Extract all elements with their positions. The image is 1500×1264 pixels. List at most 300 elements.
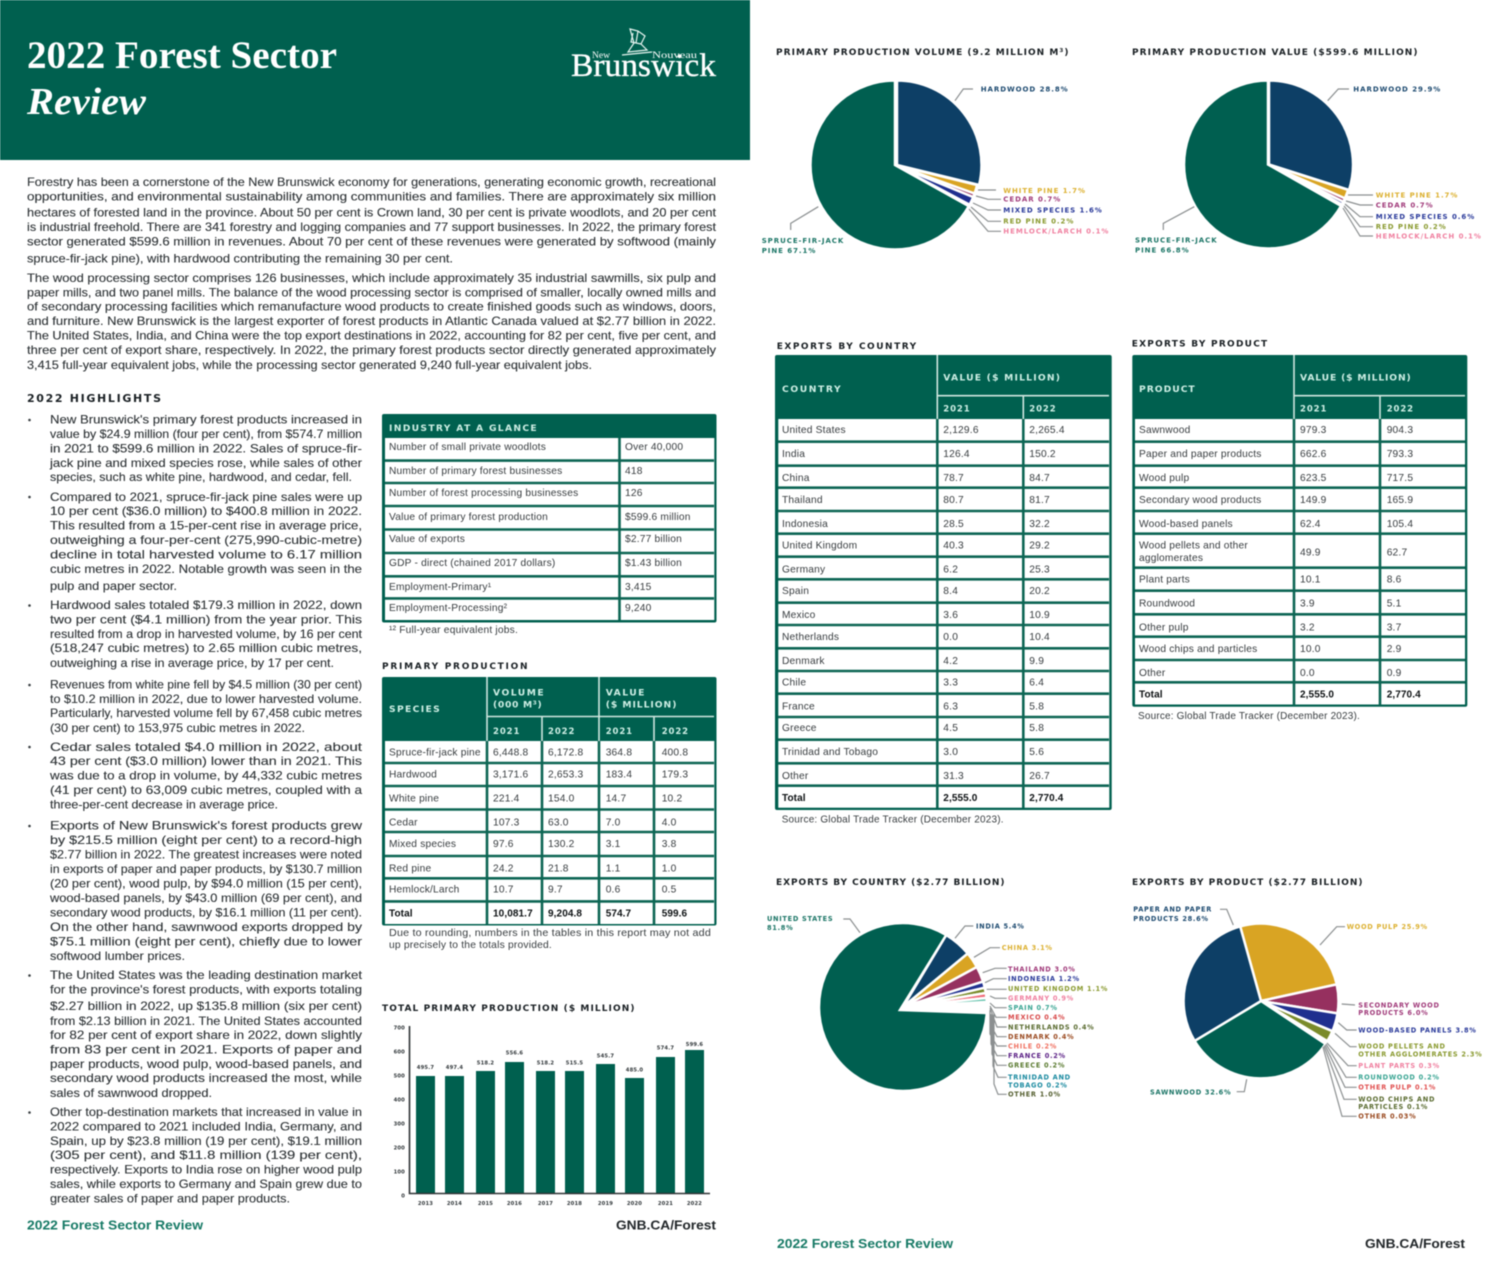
- pie labels: CEDAR 0.7%: [1376, 201, 1434, 209]
- pie labels: OTHER 1.0%: [1008, 1091, 1061, 1099]
- table: primary production: 7.0: [606, 818, 621, 828]
- intro text: is industrial freehold. There are 341 forestry and logging companies and 77 support businesses. In 2022, the primary forest: [27, 221, 717, 234]
- table: primary production: White pine: [389, 794, 439, 804]
- table: exports by country: 3.3: [943, 678, 958, 688]
- table: primary production: 599.6: [662, 908, 688, 920]
- heading: total primary production: TOTAL PRIMARY PRODUCTION ($ MILLION): [382, 1004, 635, 1014]
- table: exports by country: 2,555.0: [943, 793, 978, 804]
- table: exports by product: Paper and paper products: [1139, 449, 1262, 460]
- pie labels: PINE 67.1%: [762, 247, 816, 255]
- highlights bullet list: resulted from a drop in harvested volume, by 16 per cent: [50, 628, 363, 641]
- table: exports by product: 49.9: [1300, 548, 1321, 558]
- table: primary production: ($ MILLION): [606, 700, 678, 710]
- table: primary production: 107.3: [493, 818, 520, 828]
- highlights bullet list: greater sales of paper and paper products.: [50, 1192, 290, 1206]
- pie labels: [762, 85, 1109, 255]
- bars: [416, 1050, 704, 1194]
- table: exports by country: Germany: [782, 564, 826, 576]
- pie labels: WOOD CHIPS AND: [1358, 1096, 1435, 1104]
- table: exports by country: China: [782, 473, 810, 484]
- table: exports by product: 3.2: [1300, 622, 1315, 634]
- table: primary production: 1.0: [662, 864, 677, 874]
- intro text: three per cent of export share, respectively. In 2022, the primary forest products sector directly generated approximately: [27, 344, 716, 357]
- pie labels: ROUNDWOOD 0.2%: [1358, 1074, 1440, 1082]
- table: exports by country: France: [782, 702, 815, 712]
- highlights bullet list: for 82 per cent of export share in 2022, down slightly: [50, 1029, 362, 1042]
- table: industry at a glance: 418: [625, 466, 643, 477]
- table: primary production: (000 M³): [493, 700, 543, 710]
- table: exports by product: Other: [1139, 668, 1166, 679]
- intro text: of secondary processing facilities which remanufacture wood products to create finished goods such as windows, doors,: [27, 300, 716, 314]
- highlights bullet list: in exports of paper and paper products, by $130.7 million: [50, 863, 362, 876]
- New Brunswick logo: Brunswick: [571, 48, 716, 84]
- table: exports by product: 8.6: [1387, 574, 1402, 586]
- heading: exports by product table: EXPORTS BY PRODUCT: [1132, 340, 1268, 350]
- highlights bullet list: This resulted from a 15-per-cent rise in average price,: [50, 520, 362, 532]
- table: exports by product: PRODUCT: [1139, 384, 1196, 395]
- table: exports by product: 3.7: [1387, 622, 1402, 634]
- y axis labels: 500: [394, 1074, 405, 1080]
- table: exports by country: United States: [782, 425, 846, 436]
- table: exports by product: Wood chips and particles: [1139, 644, 1257, 655]
- table: exports by product: 2,770.4: [1387, 690, 1421, 700]
- table: exports by country: Mexico: [782, 610, 816, 621]
- highlights bullet list: [28, 414, 363, 1206]
- highlights bullet list: secondary wood products increased the most, while: [50, 1072, 362, 1085]
- table: industry at a glance: $599.6 million: [625, 512, 691, 523]
- pie labels: [1135, 85, 1482, 254]
- table: industry at a glance: $2.77 billion: [625, 534, 682, 545]
- y axis labels: 0: [401, 1194, 405, 1200]
- table: industry at a glance: INDUSTRY AT A GLANCE: [389, 423, 538, 434]
- year labels: 2019: [598, 1201, 613, 1207]
- y axis labels: 200: [394, 1146, 405, 1152]
- table: industry at a glance: Value of primary forest production: [389, 512, 548, 523]
- intro text: 3,415 full-year equivalent jobs, while the processing sector generated 9,240 full-year equivalent jobs.: [27, 359, 592, 372]
- pie labels: SPRUCE-FIR-JACK: [1135, 236, 1218, 244]
- pie labels: GERMANY 0.9%: [1008, 994, 1074, 1002]
- pie labels: CHILE 0.2%: [1008, 1042, 1057, 1050]
- bar value labels: 518.2: [537, 1060, 554, 1066]
- table: primary production: 21.8: [548, 864, 569, 874]
- table: primary production: 0.5: [662, 884, 677, 896]
- highlights bullet list: pulp and paper sector.: [50, 580, 177, 593]
- pie labels: NETHERLANDS 0.4%: [1008, 1023, 1094, 1031]
- table: exports by country: India: [782, 449, 805, 460]
- table: exports by country: 2,265.4: [1029, 425, 1065, 436]
- highlights bullet list: sales, while exports to Germany and Spain grew due to: [50, 1178, 363, 1191]
- pie chart: primary production volume: [762, 80, 1109, 255]
- bar value labels: 574.7: [657, 1046, 674, 1052]
- table: primary production: 1.1: [606, 864, 621, 874]
- source note: country table: Source: Global Trade Tracker (December 2023).: [782, 814, 1004, 826]
- pie labels: MIXED SPECIES 1.6%: [1003, 206, 1103, 214]
- year labels: 2021: [658, 1201, 673, 1207]
- y axis labels: 600: [394, 1050, 405, 1056]
- report title: [26, 34, 337, 123]
- table: primary production: 63.0: [548, 818, 569, 828]
- table: exports by country: 31.3: [943, 771, 964, 782]
- table: exports by country: COUNTRY: [782, 384, 842, 395]
- table: primary production: Total: [389, 908, 413, 920]
- pie labels: THAILAND 3.0%: [1008, 965, 1076, 973]
- highlights bullet list: was due to a drop in volume, by 44,332 cubic metres: [49, 770, 362, 782]
- New Brunswick logo: [571, 29, 716, 84]
- table: primary production: 97.6: [493, 839, 514, 850]
- table: primary production: 14.7: [606, 794, 626, 804]
- highlights bullet list: respectively. Exports to India rose on higher wood pulp: [50, 1164, 363, 1176]
- table: primary production: 2022: [548, 727, 575, 737]
- table: primary production: VOLUME: [493, 688, 545, 698]
- table: industry at a glance: Employment-Primary¹: [389, 582, 492, 593]
- year labels: 2020: [627, 1201, 642, 1207]
- footnote: jobs: ¹² Full-year equivalent jobs.: [389, 625, 518, 636]
- highlights bullet list: outweighing a rise in average price, by 17 per cent.: [50, 657, 334, 670]
- table: exports by product: 149.9: [1300, 495, 1327, 506]
- y axis labels: [394, 1026, 405, 1200]
- pie labels: SPRUCE-FIR-JACK: [762, 237, 844, 245]
- footer: right page: 2022 Forest Sector Review: [777, 1236, 954, 1251]
- table: primary production: Mixed species: [389, 839, 456, 850]
- pie labels: TRINIDAD AND: [1008, 1074, 1071, 1082]
- note: rounding: Due to rounding, numbers in the tables in this report may not add: [389, 928, 711, 939]
- table: exports by country: Netherlands: [782, 632, 839, 643]
- table: exports by country: 5.6: [1029, 747, 1044, 758]
- table: primary production: 183.4: [606, 770, 632, 780]
- highlights bullet list: 2022 compared to 2021 included India, Germany, and: [50, 1120, 362, 1134]
- highlights bullet list: softwood lumber prices.: [50, 950, 185, 963]
- table: exports by product: 2,555.0: [1300, 690, 1334, 700]
- table: exports by country: 32.2: [1029, 519, 1050, 530]
- heading: primary production volume: PRIMARY PRODUCTION VOLUME (9.2 MILLION M³): [776, 48, 1069, 58]
- pie labels: OTHER AGGLOMERATES 2.3%: [1358, 1050, 1482, 1058]
- table: exports by country: 25.3: [1029, 564, 1050, 576]
- table: primary production: 10,081.7: [493, 908, 533, 920]
- table: exports by country: Trinidad and Tobago: [782, 747, 878, 758]
- table: exports by country: [775, 355, 1112, 810]
- table: exports by product: Secondary wood products: [1139, 495, 1261, 506]
- table: exports by product: Sawnwood: [1139, 425, 1191, 436]
- bar value labels: 495.7: [417, 1065, 434, 1071]
- pie labels: HARDWOOD 28.8%: [981, 85, 1069, 93]
- table: industry at a glance: Value of exports: [389, 534, 465, 545]
- highlights bullet list: Compared to 2021, spruce-fir-jack pine sales were up: [50, 491, 363, 504]
- table: exports by country: 2022: [1029, 404, 1057, 414]
- table: exports by product: 2.9: [1387, 644, 1402, 655]
- table: primary production: SPECIES: [389, 704, 441, 715]
- table: exports by product: Wood pellets and other: [1139, 540, 1248, 552]
- table: primary production: 6,448.8: [493, 748, 529, 758]
- intro text: and furniture. New Brunswick is the largest exporter of forest products in Atlantic Canada valued at $2.77 billion in 2022.: [27, 315, 716, 328]
- bar value labels: 485.0: [626, 1068, 643, 1074]
- y axis labels: 300: [394, 1122, 405, 1128]
- highlights bullet list: 43 per cent ($3.0 million) lower than in 2021. This: [50, 755, 362, 768]
- table: industry at a glance: 126: [625, 488, 643, 499]
- table: exports by country: 8.4: [943, 586, 958, 597]
- table: exports by country: 6.2: [943, 564, 958, 576]
- table: primary production: 3.8: [662, 839, 677, 850]
- highlights bullet list: cubic metres in 2022. Notable growth was seen in the: [50, 563, 362, 576]
- table: industry at a glance: Number of primary forest businesses: [389, 466, 562, 477]
- highlights bullet list: paper products, wood pulp, wood-based panels, and: [50, 1058, 362, 1071]
- pie labels: [767, 915, 1108, 1099]
- pie labels: TOBAGO 0.2%: [1008, 1081, 1068, 1089]
- highlights bullet list: jack pine and mixed species rose, while sales of other: [49, 457, 362, 470]
- table: exports by product: Total: [1139, 690, 1163, 700]
- highlights bullet list: species, such as white pine, hardwood, and cedar, fell.: [50, 471, 352, 484]
- table: exports by country: 0.0: [943, 632, 958, 643]
- table: exports by product: 662.6: [1300, 449, 1327, 460]
- highlights bullet list: secondary wood products, by $16.1 million (11 per cent).: [50, 906, 362, 920]
- highlights bullet list: New Brunswick's primary forest products increased in: [50, 414, 362, 426]
- year labels: 2017: [538, 1201, 553, 1207]
- year labels: 2022: [687, 1201, 702, 1207]
- highlights bullet list: $75.1 million (eight per cent), chiefly due to lower: [50, 936, 362, 948]
- report title: Review: [26, 81, 147, 123]
- pie labels: PRODUCTS 28.6%: [1133, 915, 1209, 923]
- highlights bullet list: two per cent ($4.1 million) from the year prior. This: [50, 614, 362, 626]
- pie labels: [1133, 906, 1482, 1121]
- highlights bullet list: value by $24.9 million (four per cent), from $574.7 million: [50, 428, 362, 441]
- table: primary production: 9,204.8: [548, 908, 582, 920]
- highlights bullet list: from $2.13 billion in 2021. The United States accounted: [50, 1015, 362, 1028]
- table: exports by country: 20.2: [1029, 586, 1050, 597]
- highlights bullet list: The United States was the leading destination market: [50, 969, 363, 982]
- table: exports by country: Spain: [782, 586, 809, 597]
- intro text: sector generated $599.6 million in revenues. About 70 per cent of these revenues were generated by softwood (mainly: [27, 236, 716, 248]
- highlights bullet list: Other top-destination markets that increased in value in: [50, 1106, 362, 1119]
- table: exports by product: 5.1: [1387, 598, 1402, 610]
- table: primary production: 0.6: [606, 884, 621, 896]
- header banner: [0, 0, 750, 160]
- bar value labels: [417, 1042, 703, 1074]
- table: industry at a glance: [382, 414, 716, 622]
- highlights bullet list: for the province's forest products, with exports totaling: [50, 984, 362, 996]
- table: exports by country: 28.5: [943, 519, 964, 530]
- table: exports by country: 2021: [943, 404, 971, 414]
- table: exports by product: 2021: [1300, 404, 1327, 414]
- table: exports by product: 62.4: [1300, 519, 1321, 530]
- table: exports by country: 150.2: [1029, 449, 1056, 460]
- bar value labels: 518.2: [477, 1060, 494, 1066]
- table: exports by product: Plant parts: [1139, 574, 1190, 586]
- table: primary production: 179.3: [662, 770, 688, 780]
- table: exports by country: 10.9: [1029, 610, 1050, 621]
- pie labels: RED PINE 0.2%: [1003, 218, 1074, 226]
- highlights bullet list: Exports of New Brunswick's forest products grew: [50, 820, 363, 832]
- table: primary production: 130.2: [548, 839, 575, 850]
- table: exports by country: United Kingdom: [782, 540, 857, 552]
- table: industry at a glance: 3,415: [625, 582, 652, 593]
- table: exports by country: 3.0: [943, 747, 958, 758]
- table: exports by country: Denmark: [782, 656, 825, 667]
- table: industry at a glance: Number of small private woodlots: [389, 442, 546, 453]
- pie labels: 81.8%: [767, 924, 793, 932]
- year labels: 2013: [418, 1201, 433, 1207]
- pie labels: PARTICLES 0.1%: [1358, 1103, 1428, 1111]
- table: exports by product: 0.0: [1300, 668, 1315, 679]
- highlights bullet list: On the other hand, sawnwood exports dropped by: [50, 921, 362, 934]
- table: exports by product: Roundwood: [1139, 598, 1195, 610]
- table: exports by product: 904.3: [1387, 425, 1413, 436]
- table: exports by country: 9.9: [1029, 656, 1044, 667]
- highlights bullet list: (518,247 cubic metres) to 2.65 million cubic metres,: [50, 642, 362, 655]
- table: primary production: Spruce-fir-jack pine: [389, 748, 481, 758]
- table: primary production: 10.7: [493, 884, 514, 896]
- table: primary production: Cedar: [389, 818, 418, 828]
- highlights bullet list: (30 per cent) to 153,975 cubic metres in 2022.: [50, 722, 305, 735]
- pie labels: UNITED KINGDOM 1.1%: [1008, 985, 1108, 993]
- intro text: The wood processing sector comprises 126 businesses, which include approximately 35 industrial sawmills, six pulp and: [27, 272, 716, 285]
- table: primary production: 3.1: [606, 839, 621, 850]
- highlights bullet list: $2.27 billion in 2022, up $135.8 million (six per cent): [50, 1000, 362, 1013]
- pie chart: primary production value: [1135, 80, 1482, 254]
- table: primary production: 364.8: [606, 748, 632, 758]
- table: exports by country: Chile: [782, 678, 806, 688]
- pie labels: SAWNWOOD 32.6%: [1150, 1089, 1231, 1097]
- pie labels: PLANT PARTS 0.3%: [1358, 1062, 1440, 1070]
- table: exports by country: 5.8: [1029, 723, 1044, 734]
- footer: left page: GNB.CA/Forest: [616, 1218, 717, 1232]
- table: exports by country: Total: [782, 793, 806, 804]
- pie labels: HEMLOCK/LARCH 0.1%: [1003, 228, 1109, 236]
- year labels: 2015: [478, 1201, 493, 1207]
- pie labels: DENMARK 0.4%: [1008, 1033, 1074, 1041]
- highlights bullet list: to $10.2 million in 2022, due to lower harvested volume.: [50, 693, 362, 706]
- pie labels: SECONDARY WOOD: [1358, 1001, 1440, 1009]
- pie labels: CEDAR 0.7%: [1003, 196, 1061, 204]
- bar value labels: 545.7: [597, 1054, 614, 1060]
- source note: product table: Source: Global Trade Tracker (December 2023).: [1138, 711, 1360, 722]
- bar value labels: 497.4: [446, 1065, 463, 1071]
- table: exports by country: 2,129.6: [943, 425, 979, 436]
- table: primary production: VALUE: [606, 688, 646, 698]
- heading: exports by country pie: EXPORTS BY COUNTRY ($2.77 BILLION): [776, 878, 1005, 888]
- table: industry at a glance: Number of forest processing businesses: [389, 488, 578, 499]
- table: exports by product: agglomerates: [1139, 553, 1203, 564]
- table: primary production: 2021: [606, 727, 633, 737]
- intro text: Forestry has been a cornerstone of the New Brunswick economy for generations, generating economic growth, recreational: [27, 176, 716, 189]
- table: industry at a glance: 9,240: [625, 603, 652, 614]
- pie labels: WOOD PULP 25.9%: [1347, 923, 1428, 931]
- table: exports by country: 26.7: [1029, 771, 1050, 782]
- table: exports by product: 10.0: [1300, 644, 1321, 655]
- table: exports by country: Other: [782, 771, 809, 782]
- table: exports by product: 623.5: [1300, 473, 1327, 484]
- year labels: 2018: [567, 1201, 582, 1207]
- heading: exports by country table: EXPORTS BY COUNTRY: [777, 342, 917, 352]
- pie labels: WOOD-BASED PANELS 3.8%: [1358, 1026, 1477, 1034]
- table: primary production: 2022: [662, 727, 689, 737]
- table: exports by country: 2,770.4: [1029, 793, 1064, 804]
- pie labels: CHINA 3.1%: [1002, 944, 1053, 952]
- table: exports by country: 4.5: [943, 723, 958, 734]
- table: exports by country: 3.6: [943, 610, 958, 621]
- table: exports by product: Wood pulp: [1139, 473, 1189, 484]
- table: exports by country: 6.4: [1029, 678, 1044, 688]
- table: exports by country: Indonesia: [782, 519, 828, 530]
- year labels: 2014: [447, 1201, 462, 1207]
- pie labels: WHITE PINE 1.7%: [1003, 187, 1086, 195]
- pie labels: INDONESIA 1.2%: [1008, 975, 1080, 983]
- highlights bullet list: by $215.5 million (eight per cent) to a record-high: [50, 834, 362, 847]
- pie labels: WOOD PELLETS AND: [1358, 1042, 1446, 1050]
- intro text: paper mills, and two panel mills. The balance of the wood processing sector is comprised of smaller, locally owned mills and: [27, 286, 716, 300]
- table: exports by product: 717.5: [1387, 473, 1413, 484]
- intro text: [27, 176, 717, 372]
- table: exports by product: 165.9: [1387, 495, 1413, 506]
- highlights bullet list: Particularly, harvested volume fell by 67,458 cubic metres: [50, 707, 362, 720]
- report title: 2022 Forest Sector: [27, 34, 337, 77]
- table: exports by product: 0.9: [1387, 668, 1402, 679]
- pie labels: RED PINE 0.2%: [1376, 223, 1447, 231]
- table: exports by product: 105.4: [1387, 519, 1413, 530]
- highlights bullet list: (41 per cent) to 63,009 cubic metres, coupled with a: [50, 784, 363, 797]
- bar value labels: 599.6: [686, 1042, 703, 1048]
- footer: right page: [777, 1236, 1466, 1251]
- table: primary production: [382, 677, 716, 926]
- table: exports by country: 4.2: [943, 656, 958, 667]
- pie labels: UNITED STATES: [767, 915, 833, 923]
- bar value labels: 515.5: [566, 1060, 583, 1066]
- table: industry at a glance: GDP - direct (chained 2017 dollars): [389, 558, 556, 569]
- pie labels: OTHER 0.03%: [1358, 1113, 1416, 1121]
- footer: left page: [27, 1218, 717, 1232]
- table: exports by product: 2022: [1387, 404, 1414, 414]
- table: primary production: 4.0: [662, 818, 677, 828]
- table: exports by product: Wood-based panels: [1139, 519, 1233, 530]
- note: rounding: up precisely to the totals provided.: [389, 940, 552, 951]
- pie labels: PRODUCTS 6.0%: [1358, 1009, 1428, 1017]
- intro text: The United States, India, and China were the top export destinations in 2022, accounting for 82 per cent, five per cent, and: [27, 330, 716, 342]
- highlights bullet list: sales of sawnwood dropped.: [50, 1087, 212, 1100]
- pie labels: SPAIN 0.7%: [1008, 1004, 1058, 1012]
- table: exports by product: 62.7: [1387, 548, 1407, 558]
- highlights bullet list: decline in total harvested volume to 6.17 million: [50, 548, 362, 562]
- table: primary production: 154.0: [548, 794, 575, 804]
- heading: primary production: PRIMARY PRODUCTION: [382, 662, 528, 672]
- table: exports by country: 81.7: [1029, 495, 1050, 506]
- table: primary production: 400.8: [662, 748, 688, 758]
- pie labels: PAPER AND PAPER: [1133, 906, 1212, 914]
- table: exports by country: 6.3: [943, 702, 958, 712]
- pie labels: INDIA 5.4%: [976, 922, 1025, 930]
- table: primary production: 3,171.6: [493, 770, 529, 780]
- highlights bullet list: Revenues from white pine fell by $4.5 million (30 per cent): [50, 678, 362, 692]
- table: exports by product: Other pulp: [1139, 622, 1189, 634]
- year labels: 2016: [507, 1201, 522, 1207]
- table: exports by country: 78.7: [943, 473, 964, 484]
- table: primary production: 24.2: [493, 864, 514, 874]
- intro text: hectares of forested land in the province. About 50 per cent is Crown land, 30 per cent is private woodlots, and 20 per cent: [27, 206, 717, 220]
- pie chart: exports by product: [1133, 906, 1482, 1121]
- table: industry at a glance: $1.43 billion: [625, 558, 682, 569]
- pie chart: exports by country: [767, 915, 1108, 1099]
- y axis labels: 400: [394, 1098, 405, 1104]
- pie labels: WHITE PINE 1.7%: [1376, 191, 1458, 199]
- pie labels: HARDWOOD 29.9%: [1353, 85, 1441, 93]
- table: exports by country: VALUE ($ MILLION): [943, 372, 1061, 383]
- footer: left page: 2022 Forest Sector Review: [27, 1218, 204, 1232]
- table: primary production: 9.7: [548, 884, 563, 896]
- table: exports by product: 10.1: [1300, 574, 1321, 586]
- highlights bullet list: Hardwood sales totaled $179.3 million in 2022, down: [50, 599, 362, 612]
- y axis labels: 700: [394, 1026, 405, 1032]
- table: industry at a glance: Over 40,000: [625, 442, 683, 453]
- heading: exports by product pie: EXPORTS BY PRODUCT ($2.77 BILLION): [1132, 878, 1363, 888]
- table: primary production: 574.7: [606, 908, 632, 920]
- highlights bullet list: $2.77 billion in 2022. The greatest increases were noted: [50, 848, 362, 862]
